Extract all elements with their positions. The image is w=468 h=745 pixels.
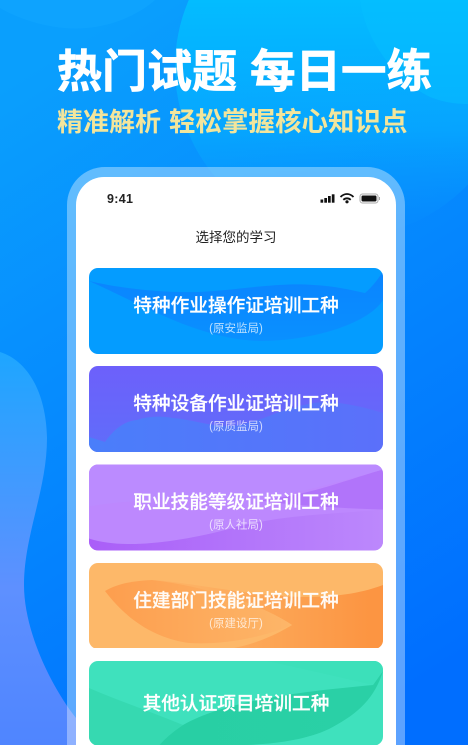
card: 特种作业操作证: (原安监局) [209, 321, 263, 335]
subtitle: 精准解析 [57, 107, 161, 137]
card: 其他认证项目: 其他认证项目培训工种 [143, 693, 329, 714]
icon: battery [360, 194, 380, 203]
phone frame [67, 167, 405, 745]
status time: 9:41 [107, 192, 133, 206]
icon: signal [320, 194, 334, 203]
title: 每日一练 [250, 46, 432, 97]
card: 住建部门技能证: 住建部门技能证培训工种 [133, 590, 339, 611]
title: 热门试题 [57, 46, 237, 97]
card: 住建部门技能证: (原建设厅) [209, 616, 263, 630]
card: 特种设备作业证: (原质监局) [209, 420, 263, 433]
card: 职业技能等级证: (原人社局) [209, 518, 263, 532]
icon: wifi [340, 194, 354, 202]
card: 职业技能等级证 [89, 464, 383, 550]
phone screen [76, 177, 396, 745]
card: 职业技能等级证: 职业技能等级证培训工种 [133, 492, 339, 512]
title [57, 46, 432, 97]
subtitle [57, 107, 408, 137]
card: 特种设备作业证 [89, 366, 383, 452]
card: 住建部门技能证 [89, 563, 383, 648]
card: 特种作业操作证: 特种作业操作证培训工种 [133, 295, 339, 316]
card: 特种设备作业证: 特种设备作业证培训工种 [133, 393, 339, 414]
screen heading: 选择您的学习 [196, 229, 276, 245]
subtitle: 轻松掌握核心知识点 [169, 107, 408, 137]
card: 特种作业操作证 [89, 268, 383, 354]
card: 其他认证项目 [89, 661, 383, 745]
